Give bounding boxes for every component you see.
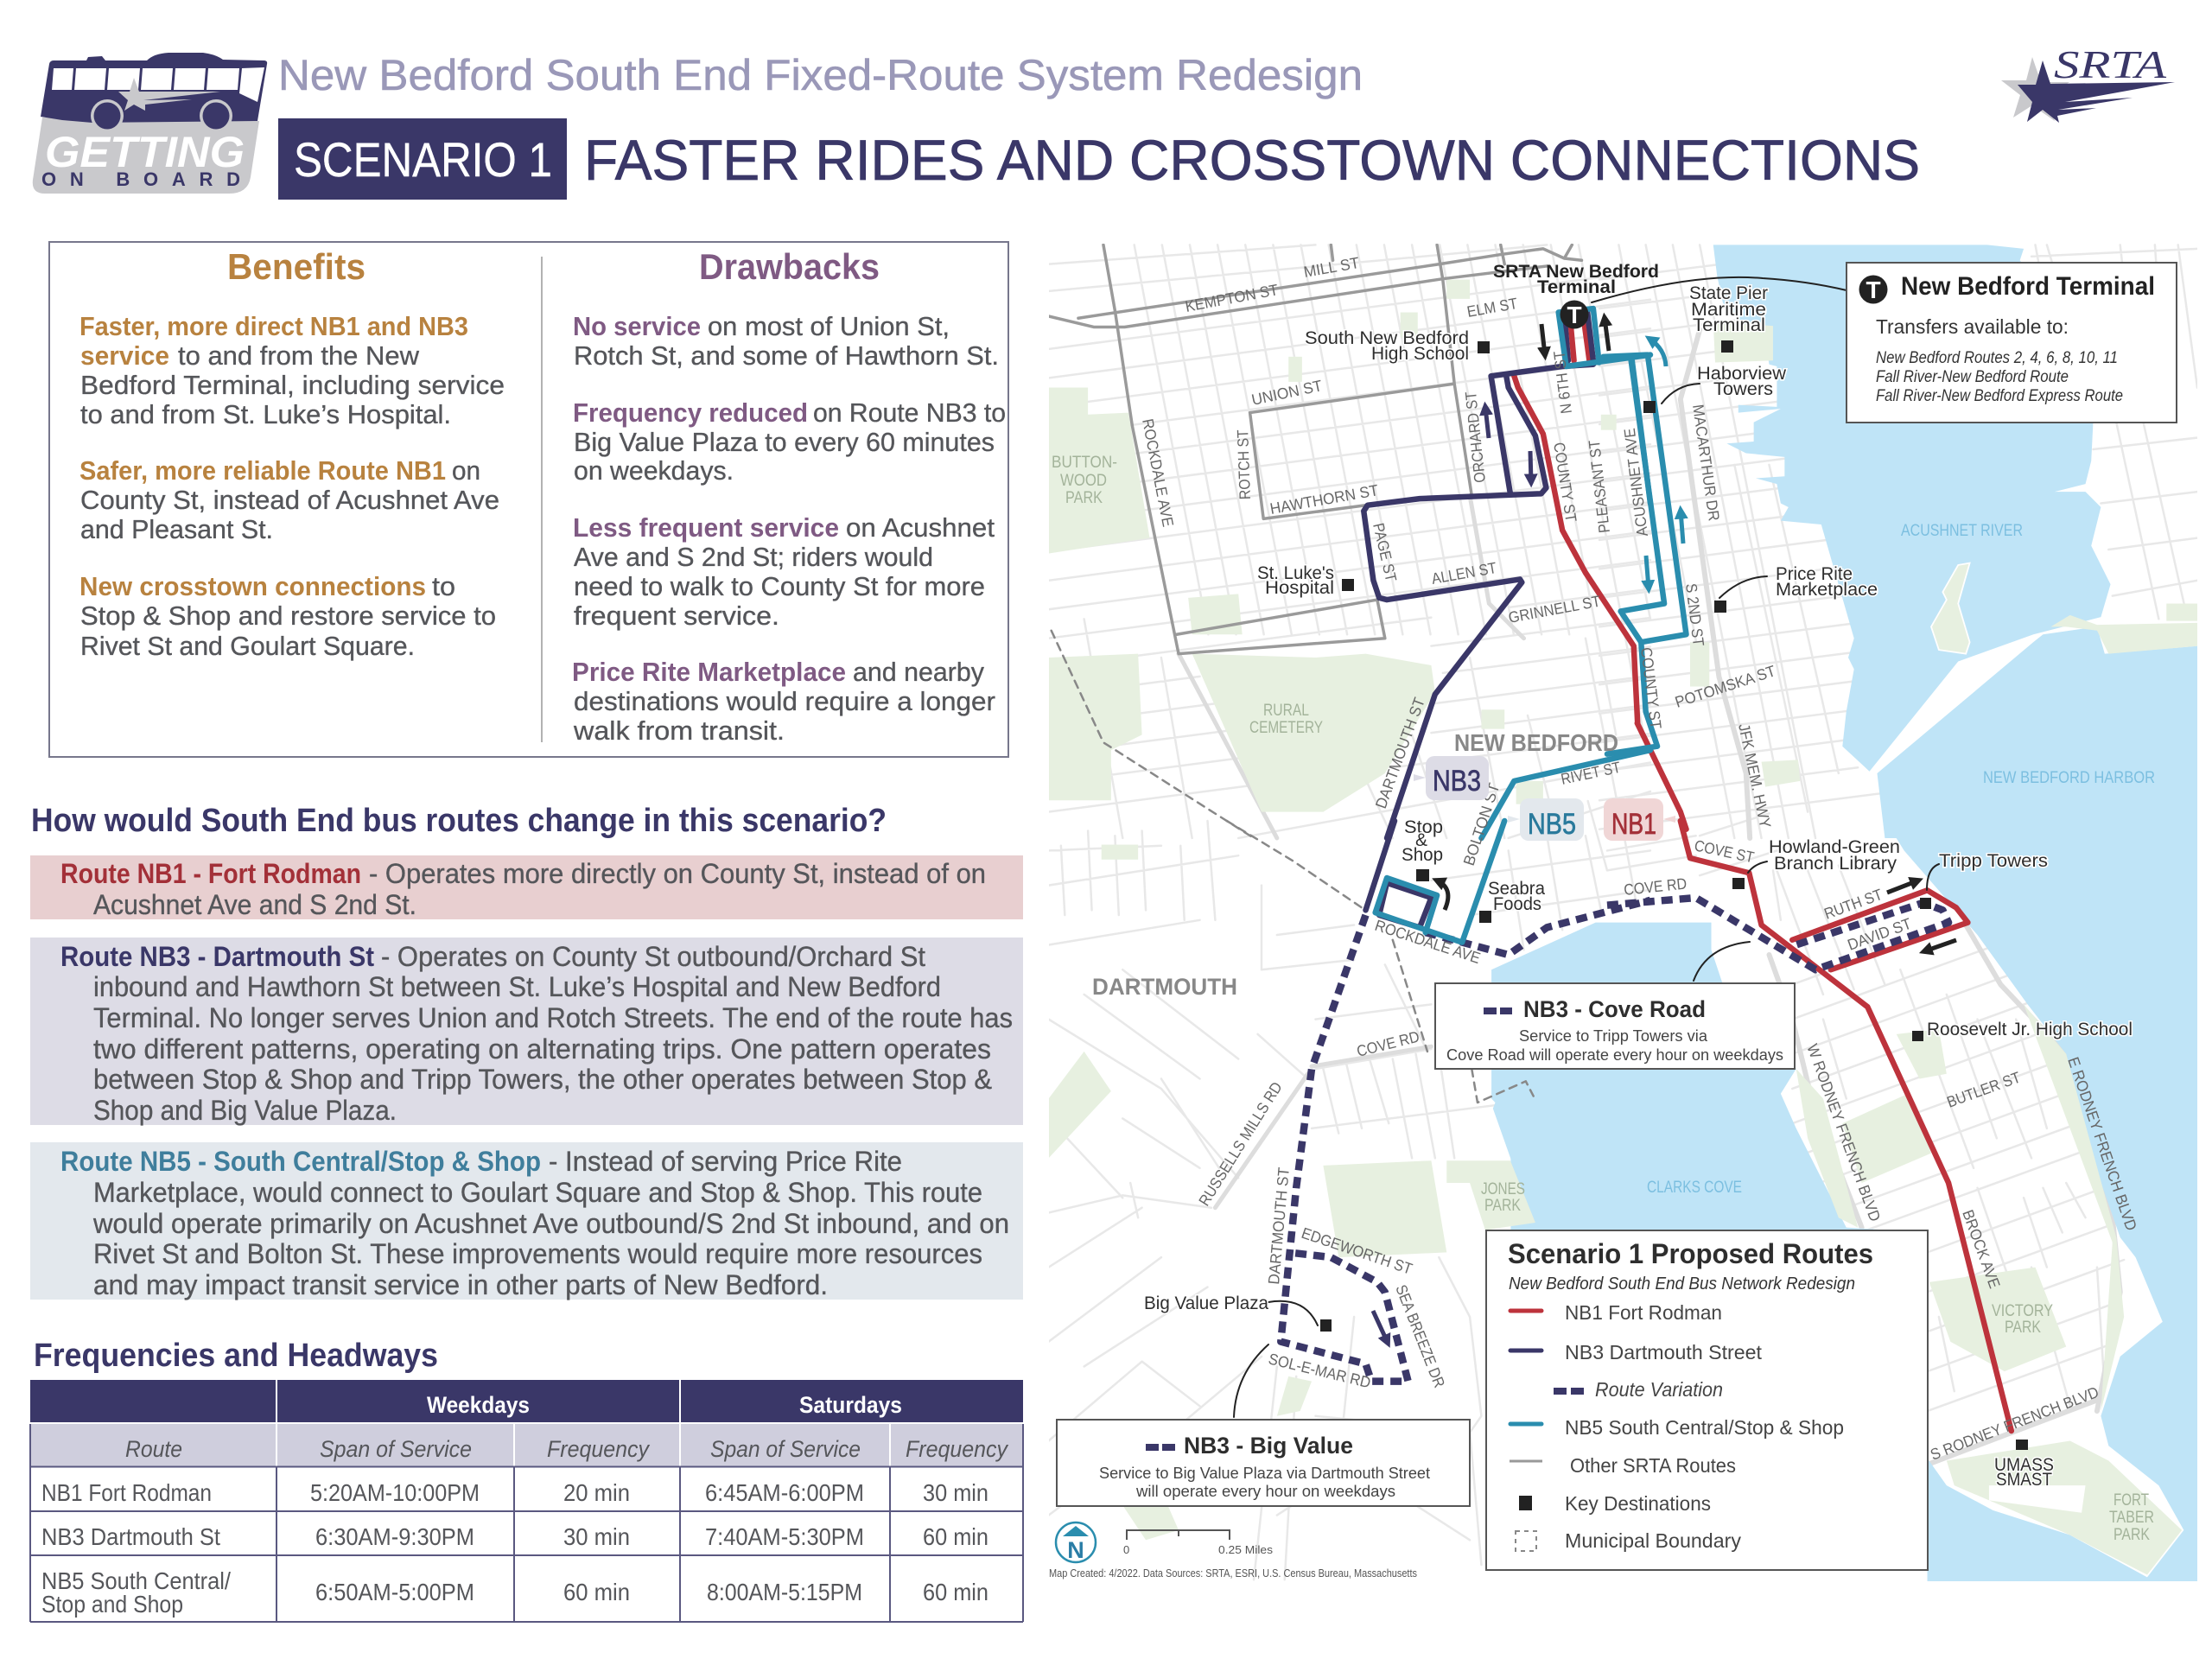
place and destination labels: RURAL bbox=[1263, 702, 1309, 720]
drawbacks text: Big Value Plaza to every 60 minutes bbox=[574, 427, 995, 457]
drawbacks text: on most of Union St, bbox=[708, 311, 950, 341]
table: frequencies bbox=[30, 1380, 1023, 1622]
street labels: PLEASANT ST bbox=[1586, 439, 1613, 534]
route NB3 bbox=[1363, 313, 1593, 927]
drawbacks text: destinations would require a longer bbox=[574, 686, 995, 716]
drawbacks text: No service bbox=[573, 311, 701, 341]
drawbacks text: need to walk to County St for more bbox=[574, 571, 985, 601]
water bbox=[1491, 245, 2197, 1581]
callout: New Bedford Terminal bbox=[1847, 263, 2177, 423]
other SRTA routes bbox=[1049, 245, 1581, 654]
panel: route NB5: Marketplace, would connect to Goulart Square and Stop & Shop. This route bbox=[93, 1177, 982, 1208]
benefits text: Bedford Terminal, including service bbox=[80, 370, 505, 400]
benefits text: Safer, more reliable Route NB1 bbox=[79, 455, 446, 486]
panel: route NB3: Shop and Big Value Plaza. bbox=[93, 1095, 397, 1126]
place and destination labels: NEW BEDFORD bbox=[1454, 729, 1618, 756]
drawbacks text: Less frequent service bbox=[573, 512, 839, 543]
legend: New Bedford South End Bus Network Redesign bbox=[1509, 1274, 1855, 1294]
scale bar bbox=[1123, 1530, 1274, 1556]
legend item: NB3: NB3 Dartmouth Street bbox=[1565, 1341, 1763, 1363]
place and destination labels: Big Value Plaza bbox=[1144, 1294, 1268, 1313]
place and destination labels: Terminal bbox=[1693, 315, 1765, 335]
place and destination labels: Howland-Green bbox=[1769, 837, 1900, 857]
panel: route NB3: Route NB3 - Dartmouth St bbox=[60, 941, 374, 972]
street labels bbox=[1139, 254, 2140, 1464]
drawbacks text: on Acushnet bbox=[846, 512, 995, 543]
street labels: S 2ND ST bbox=[1682, 582, 1707, 647]
drawbacks text: walk from transit. bbox=[573, 715, 785, 746]
table: frequencies: Span of Service bbox=[710, 1436, 861, 1462]
street labels: ROCKDALE AVE bbox=[1139, 417, 1177, 528]
drawbacks text: on weekdays. bbox=[574, 455, 734, 486]
benefits text: New crosstown connections bbox=[79, 571, 426, 601]
benefits text: Stop & Shop and restore service to bbox=[80, 601, 496, 631]
street labels: RIVET ST bbox=[1560, 759, 1622, 788]
table: frequencies: NB5 South Central/ bbox=[41, 1567, 231, 1594]
panel: route NB3: inbound and Hawthorn St between St. Luke’s Hospital and New Bedford bbox=[93, 971, 941, 1002]
place and destination labels: Price Rite bbox=[1776, 564, 1853, 584]
place and destination labels: CEMETERY bbox=[1249, 719, 1323, 737]
street labels: COVE ST bbox=[1693, 836, 1756, 866]
municipal boundary bbox=[1052, 631, 1534, 1103]
place and destination labels: Foods bbox=[1493, 894, 1541, 914]
street labels: EDGEWORTH ST bbox=[1300, 1224, 1414, 1278]
panel: route NB5: - Instead of serving Price Rite bbox=[549, 1146, 902, 1177]
place and destination labels: PARK bbox=[1484, 1197, 1521, 1215]
callout: NB3 Cove Road: NB3 - Cove Road bbox=[1523, 996, 1706, 1022]
place and destination labels: PARK bbox=[2113, 1526, 2150, 1544]
route NB1 bbox=[1514, 318, 2012, 1431]
scenario badge bbox=[278, 118, 567, 200]
logo: SRTA bbox=[2001, 42, 2175, 123]
benefits text: Faster, more direct NB1 and NB3 bbox=[79, 311, 468, 341]
drawbacks text: Price Rite Marketplace bbox=[572, 657, 846, 687]
street labels: ELM ST bbox=[1465, 295, 1519, 321]
legend item: key destinations: Key Destinations bbox=[1565, 1492, 1711, 1515]
table: frequencies: 20 min bbox=[563, 1479, 630, 1506]
place and destination labels: Seabra bbox=[1488, 879, 1545, 899]
callout: New Bedford Terminal: New Bedford Terminal bbox=[1901, 272, 2155, 301]
panel: route NB1 bbox=[30, 855, 1023, 920]
street labels: BROCK AVE bbox=[1959, 1208, 2004, 1291]
street labels: E RODNEY FRENCH BLVD bbox=[2064, 1055, 2140, 1233]
map base: streets, water, parks bbox=[1049, 244, 2197, 1581]
place and destination labels: Towers bbox=[1713, 379, 1773, 399]
logo: SRTA: SRTA bbox=[2054, 42, 2167, 86]
benefits text: service bbox=[80, 340, 169, 371]
place and destination labels: Branch Library bbox=[1774, 854, 1897, 874]
panel: route NB1: - Operates more directly on County St, instead of on bbox=[369, 858, 986, 889]
drawbacks text: Ave and S 2nd St; riders would bbox=[574, 542, 933, 572]
logo: Getting On Board bus bbox=[33, 53, 267, 194]
street labels: POTOMSKA ST bbox=[1673, 662, 1777, 711]
benefits text: on bbox=[452, 455, 480, 486]
street labels: PAGE ST bbox=[1370, 521, 1400, 583]
place and destination labels: TABER bbox=[2109, 1509, 2154, 1527]
legend item: NB1: NB1 Fort Rodman bbox=[1565, 1301, 1722, 1324]
icon: terminal T on map: T bbox=[1567, 302, 1582, 328]
table: frequencies: Weekdays bbox=[427, 1392, 530, 1418]
route tag: NB3: NB3 bbox=[1433, 765, 1481, 798]
table: frequencies: 60 min bbox=[563, 1579, 630, 1605]
table: frequencies: 30 min bbox=[923, 1479, 988, 1506]
callout: New Bedford Terminal: Transfers available to: bbox=[1876, 315, 2069, 338]
benefits text: Rivet St and Goulart Square. bbox=[80, 631, 415, 661]
drawbacks text: frequent service. bbox=[574, 601, 779, 631]
panel: route NB5: Rivet St and Bolton St. These improvements would require more resources bbox=[93, 1238, 982, 1269]
direction arrows bbox=[1373, 318, 1956, 1343]
table: frequencies: 6:45AM-6:00PM bbox=[705, 1479, 864, 1506]
street labels: COVE RD bbox=[1623, 874, 1688, 899]
street labels: ORCHARD ST bbox=[1462, 391, 1489, 484]
panel: route NB3: between Stop & Shop and Tripp Towers, the other operates between Stop & bbox=[93, 1064, 992, 1095]
route tag: NB5: NB5 bbox=[1528, 808, 1576, 841]
legend item: NB5: NB5 South Central/Stop & Shop bbox=[1565, 1416, 1844, 1439]
panel: route NB3: two different patterns, operating on alternating trips. One pattern operates bbox=[93, 1033, 991, 1065]
map bbox=[1049, 244, 2197, 1581]
place and destination labels: DARTMOUTH bbox=[1092, 974, 1237, 1000]
table: frequencies: NB3 Dartmouth St bbox=[41, 1523, 220, 1550]
place and destination labels: Maritime bbox=[1691, 300, 1766, 320]
icon: north arrow bbox=[1056, 1522, 1096, 1563]
table: frequencies: 5:20AM-10:00PM bbox=[310, 1479, 480, 1506]
table: frequencies: Span of Service bbox=[320, 1436, 472, 1462]
table: frequencies: Frequency bbox=[906, 1436, 1008, 1462]
table: frequencies: NB1 Fort Rodman bbox=[41, 1479, 212, 1506]
panel: route NB5: Route NB5 - South Central/Stop & Shop bbox=[60, 1146, 541, 1177]
place and destination labels: Roosevelt Jr. High School bbox=[1927, 1020, 2133, 1039]
parks bbox=[1049, 280, 2197, 1574]
place and destination labels: NEW BEDFORD HARBOR bbox=[1983, 769, 2155, 787]
legend item: municipal boundary: Municipal Boundary bbox=[1565, 1529, 1741, 1552]
benefits text: to and from the New bbox=[178, 340, 420, 371]
street labels: SEA BREEZE DR bbox=[1392, 1282, 1448, 1390]
heading: benefits: Benefits bbox=[227, 246, 365, 287]
wider light roads bbox=[1681, 330, 1750, 838]
route NB3 variations bbox=[1281, 898, 1948, 1382]
callout: New Bedford Terminal: Fall River-New Bedford Route bbox=[1876, 368, 2069, 386]
street labels: DARTMOUTH ST bbox=[1265, 1166, 1293, 1285]
street labels: DARTMOUTH ST bbox=[1372, 696, 1428, 810]
panel: benefits and drawbacks bbox=[49, 242, 1008, 757]
place and destination labels: WOOD bbox=[1060, 472, 1107, 490]
place and destination labels: VICTORY bbox=[1992, 1302, 2053, 1320]
table: frequencies: 8:00AM-5:15PM bbox=[707, 1579, 862, 1605]
panel: route NB3: Terminal. No longer serves Union and Rotch Streets. The end of the route has bbox=[93, 1002, 1013, 1033]
drawbacks text: Frequency reduced bbox=[573, 397, 808, 428]
benefits text: County St, instead of Acushnet Ave bbox=[80, 485, 499, 515]
street labels: COUNTY ST bbox=[1550, 441, 1580, 523]
place and destination labels: FORT bbox=[2113, 1491, 2149, 1510]
street labels: SOL-E-MAR RD bbox=[1267, 1350, 1372, 1391]
street labels: GRINNELL ST bbox=[1507, 593, 1602, 626]
map credit: Map Created: 4/2022. Data Sources: SRTA, ESRI, U.S. Census Bureau, Massachusetts bbox=[1049, 1567, 1417, 1580]
table: frequencies: 6:30AM-9:30PM bbox=[315, 1523, 474, 1550]
callout: NB3 Cove Road bbox=[1435, 983, 1795, 1069]
callout: NB3 Big Value: NB3 - Big Value bbox=[1184, 1433, 1353, 1459]
place and destination labels: PARK bbox=[2005, 1319, 2041, 1337]
street labels: COVE RD bbox=[1355, 1028, 1421, 1060]
legend item: route variation: Route Variation bbox=[1595, 1378, 1723, 1401]
place and destination labels: South New Bedford bbox=[1305, 328, 1469, 348]
benefits text: and Pleasant St. bbox=[80, 514, 273, 544]
street labels: BOLTON ST bbox=[1460, 781, 1503, 868]
table: frequencies: 60 min bbox=[923, 1523, 988, 1550]
drawbacks text: and nearby bbox=[853, 657, 984, 687]
place and destination labels: St. Luke's bbox=[1257, 563, 1334, 583]
title: FASTER RIDES AND CROSSTOWN CONNECTIONS bbox=[584, 128, 1920, 192]
callout: New Bedford Terminal: New Bedford Routes 2, 4, 6, 8, 10, 11 bbox=[1876, 349, 2118, 367]
route tag: NB3 bbox=[1414, 756, 1489, 800]
panel: route NB5: would operate primarily on Acushnet Ave outbound/S 2nd St inbound, and on bbox=[92, 1208, 1009, 1239]
scale bar: 0.25 Miles bbox=[1218, 1543, 1274, 1556]
place and destination labels: BUTTON- bbox=[1052, 454, 1117, 472]
heading: drawbacks: Drawbacks bbox=[699, 246, 880, 287]
callout: New Bedford Terminal: Fall River-New Bedford Express Route bbox=[1876, 387, 2123, 405]
street labels: KEMPTON ST bbox=[1184, 281, 1280, 315]
callout: NB3 Big Value bbox=[1057, 1420, 1470, 1506]
street labels: COUNTY ST bbox=[1637, 646, 1664, 730]
panel: route NB3: - Operates on County St outbound/Orchard St bbox=[381, 941, 925, 972]
street labels: BUTLER ST bbox=[1945, 1069, 2023, 1111]
place and destination labels: High School bbox=[1371, 344, 1469, 364]
icon: north arrow: N bbox=[1067, 1537, 1084, 1563]
panel: route NB1: Acushnet Ave and S 2nd St. bbox=[93, 889, 416, 920]
street labels: RUTH ST bbox=[1822, 886, 1885, 923]
place and destination labels: & bbox=[1415, 830, 1427, 850]
legend item: other routes: Other SRTA Routes bbox=[1570, 1454, 1736, 1477]
table: frequencies: Saturdays bbox=[799, 1392, 902, 1418]
panel: route NB1: Route NB1 - Fort Rodman bbox=[60, 858, 361, 889]
route tag: NB1: NB1 bbox=[1611, 808, 1656, 841]
panel: route NB5: and may impact transit service in other parts of New Bedford. bbox=[93, 1269, 828, 1300]
benefits text: to and from St. Luke’s Hospital. bbox=[80, 399, 451, 429]
street labels: W RODNEY FRENCH BLVD bbox=[1803, 1042, 1884, 1224]
table: frequencies: Route bbox=[125, 1436, 182, 1462]
legend bbox=[1486, 1230, 1928, 1570]
street labels: MACARTHUR DR bbox=[1689, 404, 1723, 522]
drawbacks text: on Route NB3 to bbox=[813, 397, 1006, 428]
place and destination labels: SMAST bbox=[1996, 1470, 2052, 1490]
logo: Getting On Board bus: GETTING bbox=[45, 128, 245, 176]
leader lines bbox=[1234, 277, 1939, 1417]
legend: Scenario 1 Proposed Routes bbox=[1508, 1238, 1873, 1269]
route tag: NB5 bbox=[1508, 798, 1584, 841]
place and destination labels: Terminal bbox=[1537, 277, 1616, 297]
place and destination labels: State Pier bbox=[1689, 283, 1768, 303]
route NB5 bbox=[1376, 308, 1687, 943]
street labels: ACUSHNET AVE bbox=[1621, 427, 1651, 537]
table: frequencies: 60 min bbox=[923, 1579, 988, 1605]
place and destination labels: Shop bbox=[1402, 845, 1443, 865]
heading: frequencies and headways: Frequencies and Headways bbox=[34, 1338, 438, 1374]
key destination squares bbox=[1320, 340, 2028, 1450]
place and destination labels: CLARKS COVE bbox=[1647, 1179, 1742, 1197]
place and destination labels: PARK bbox=[1065, 489, 1103, 507]
panel: route NB3 bbox=[30, 938, 1023, 1126]
heading: route changes: How would South End bus routes change in this scenario? bbox=[31, 803, 887, 839]
route tag: NB1 bbox=[1604, 798, 1675, 841]
logo: Getting On Board bus: ON BOARD bbox=[41, 168, 240, 190]
subtitle: New Bedford South End Fixed-Route System Redesign bbox=[278, 51, 1363, 99]
table: frequencies: 6:50AM-5:00PM bbox=[315, 1579, 474, 1605]
table: frequencies: Frequency bbox=[547, 1436, 650, 1462]
place and destination labels: ACUSHNET RIVER bbox=[1901, 522, 2023, 540]
place and destination labels: Haborview bbox=[1697, 364, 1787, 384]
place and destination labels: Stop bbox=[1404, 817, 1443, 837]
street labels: HAWTHORN ST bbox=[1268, 481, 1380, 518]
street labels: ROCKDALE AVE bbox=[1373, 917, 1483, 967]
street labels: ALLEN ST bbox=[1430, 559, 1498, 588]
callout: NB3 Cove Road: Cove Road will operate every hour on weekdays bbox=[1446, 1046, 1783, 1064]
street labels: S RODNEY FRENCH BLVD bbox=[1928, 1383, 2101, 1464]
table: frequencies: 7:40AM-5:30PM bbox=[705, 1523, 864, 1550]
place and destination labels: Hospital bbox=[1265, 578, 1334, 598]
street labels: ROTCH ST bbox=[1234, 429, 1254, 500]
place and destination labels bbox=[1052, 262, 2155, 1544]
benefits text: to bbox=[432, 571, 455, 601]
place and destination labels: JONES bbox=[1481, 1180, 1525, 1198]
street labels: DAVID ST bbox=[1846, 915, 1914, 954]
place and destination labels: SRTA New Bedford bbox=[1493, 262, 1659, 282]
callout: NB3 Big Value: Service to Big Value Plaza via Dartmouth Street bbox=[1099, 1465, 1430, 1482]
drawbacks text: Rotch St, and some of Hawthorn St. bbox=[574, 340, 999, 371]
panel: route NB5 bbox=[30, 1142, 1023, 1300]
drawbacks text bbox=[572, 311, 1006, 746]
benefits text bbox=[79, 311, 505, 661]
table: frequencies: Stop and Shop bbox=[41, 1591, 183, 1618]
place and destination labels: Tripp Towers bbox=[1939, 851, 2048, 871]
street labels: N 6TH ST bbox=[1550, 350, 1575, 415]
scale bar: 0 bbox=[1123, 1543, 1129, 1556]
callout: NB3 Big Value: will operate every hour on weekdays bbox=[1135, 1483, 1395, 1500]
place and destination labels: Marketplace bbox=[1776, 580, 1878, 600]
scenario badge: SCENARIO 1 bbox=[294, 132, 552, 187]
callout: New Bedford Terminal: T bbox=[1866, 276, 1881, 303]
callout: NB3 Cove Road: Service to Tripp Towers via bbox=[1519, 1027, 1708, 1045]
icon: terminal T on map bbox=[1560, 301, 1588, 328]
street labels: UNION ST bbox=[1250, 377, 1324, 409]
street labels: JFK MEM. HWY bbox=[1735, 722, 1774, 830]
table: frequencies: 30 min bbox=[563, 1523, 630, 1550]
place and destination labels: UMASS bbox=[1994, 1455, 2054, 1475]
street labels: RUSSELLS MILLS RD bbox=[1195, 1079, 1286, 1209]
street labels: MILL ST bbox=[1302, 254, 1361, 281]
